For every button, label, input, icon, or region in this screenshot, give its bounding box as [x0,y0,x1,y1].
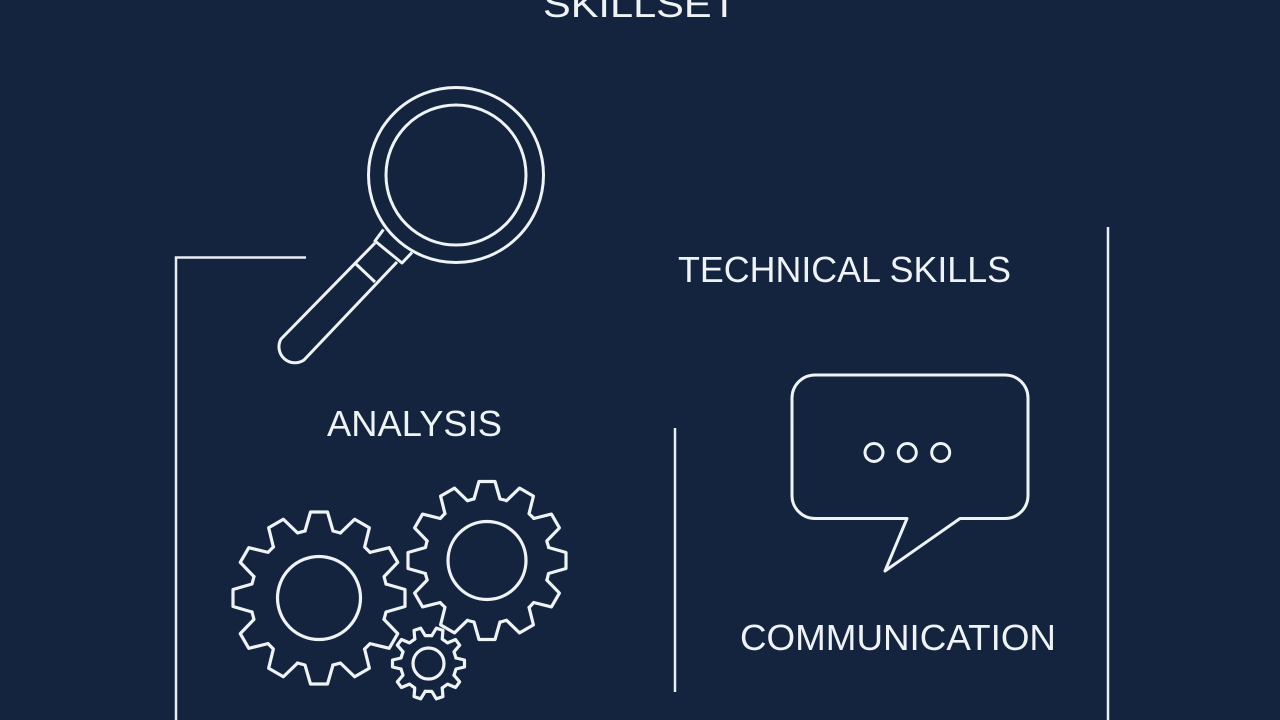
connector bracket: left [176,258,306,720]
icon: magnifying glass [279,88,544,363]
divider: right [1107,227,1109,720]
label: technical skills: TECHNICAL SKILLS [678,249,1011,290]
label: communication: COMMUNICATION [740,617,1056,658]
label: analysis: ANALYSIS [327,403,502,444]
large gear [233,512,405,684]
icon: speech bubble [792,375,1028,571]
medium gear [408,482,566,640]
small gear [392,626,465,701]
icon: gears [233,482,566,701]
divider: centre [674,428,676,692]
